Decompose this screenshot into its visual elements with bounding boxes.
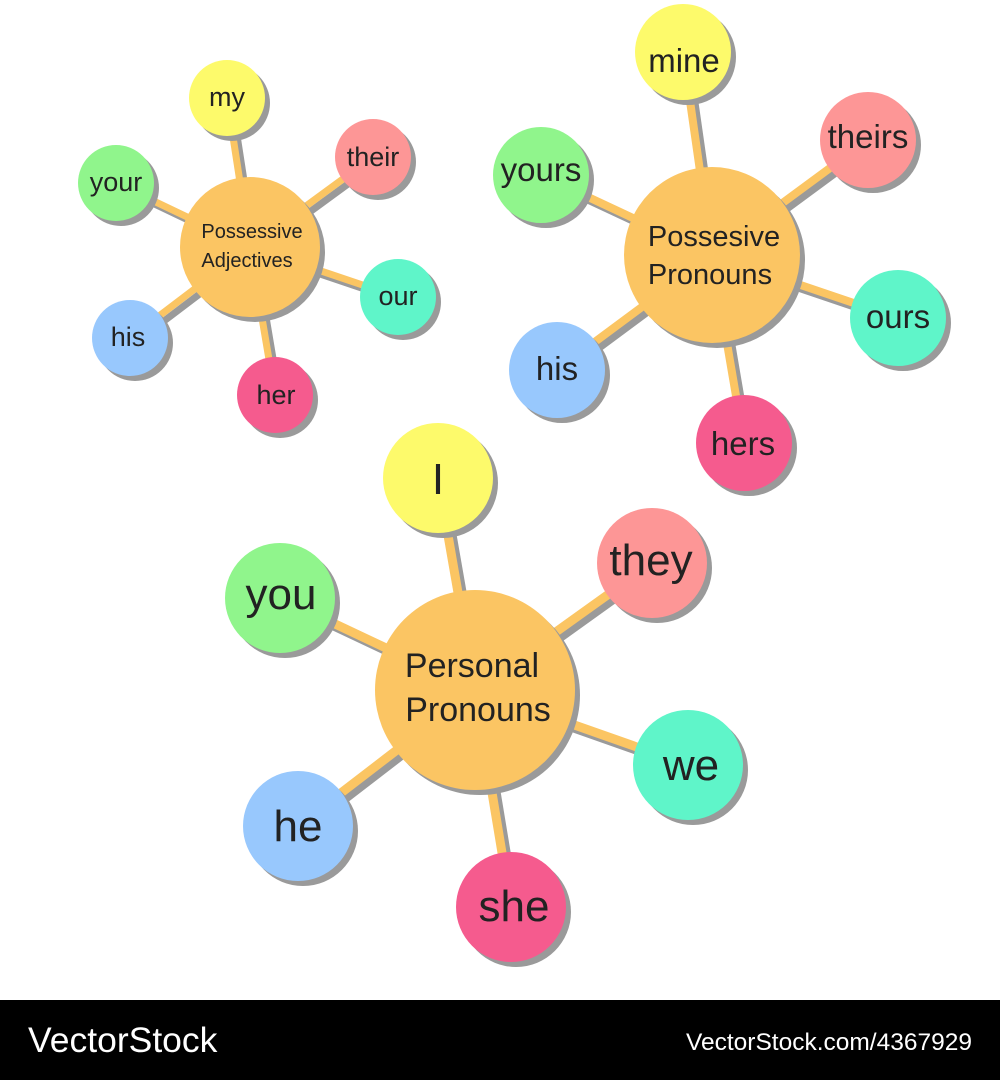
- node: you: you: [246, 570, 316, 619]
- center: Possesive Pronouns: Possesive: [648, 221, 780, 253]
- footer: url: VectorStock.com/4367929: [686, 1029, 972, 1056]
- node: your: [78, 145, 154, 221]
- node: his: [92, 300, 168, 376]
- node: mine: mine: [648, 42, 720, 79]
- center: Possessive Adjectives: [180, 177, 320, 317]
- center: Personal Pronouns: Personal: [405, 647, 539, 685]
- center: Possessive Adjectives: Adjectives: [201, 250, 293, 272]
- footer: brand: VectorStock: [28, 1020, 218, 1060]
- cluster: possessive adjectives: [78, 60, 441, 438]
- node: their: [335, 119, 411, 195]
- node: you: [225, 543, 335, 653]
- cluster: personal pronouns: [225, 423, 748, 967]
- node: theirs: [820, 92, 916, 188]
- node: hers: [696, 395, 792, 491]
- node: ours: [850, 270, 946, 366]
- center: Personal Pronouns: Pronouns: [405, 691, 551, 729]
- node: he: [243, 771, 353, 881]
- node: my: my: [209, 82, 245, 112]
- node: yours: yours: [501, 151, 581, 188]
- node: our: our: [378, 281, 418, 311]
- node: his: [509, 322, 605, 418]
- node: her: [237, 357, 313, 433]
- center: Personal Pronouns: [375, 590, 575, 790]
- center: Possessive Adjectives: Possessive: [201, 221, 303, 243]
- node: she: she: [479, 882, 549, 931]
- node: I: [383, 423, 493, 533]
- node: hers: hers: [711, 425, 775, 462]
- node: she: [456, 852, 566, 962]
- node: yours: [493, 127, 589, 223]
- node: mine: [635, 4, 731, 100]
- node: my: [189, 60, 265, 136]
- node: her: her: [256, 380, 296, 410]
- node: their: their: [347, 142, 399, 172]
- node: theirs: theirs: [828, 118, 908, 155]
- node: they: [597, 508, 707, 618]
- node: ours: ours: [866, 298, 930, 335]
- node: his: his: [536, 350, 578, 387]
- center: Possesive Pronouns: Pronouns: [648, 259, 772, 291]
- center: Possesive Pronouns: [624, 167, 800, 343]
- footer bar: [0, 1000, 1000, 1080]
- node: his: his: [111, 322, 145, 352]
- node: your: your: [90, 167, 142, 197]
- node: our: [360, 259, 436, 335]
- node: he: he: [274, 802, 322, 851]
- cluster: possessive pronouns: [493, 4, 951, 496]
- node: we: we: [662, 741, 719, 790]
- node: I: I: [432, 455, 444, 504]
- node: we: [633, 710, 743, 820]
- node: they: they: [609, 536, 693, 585]
